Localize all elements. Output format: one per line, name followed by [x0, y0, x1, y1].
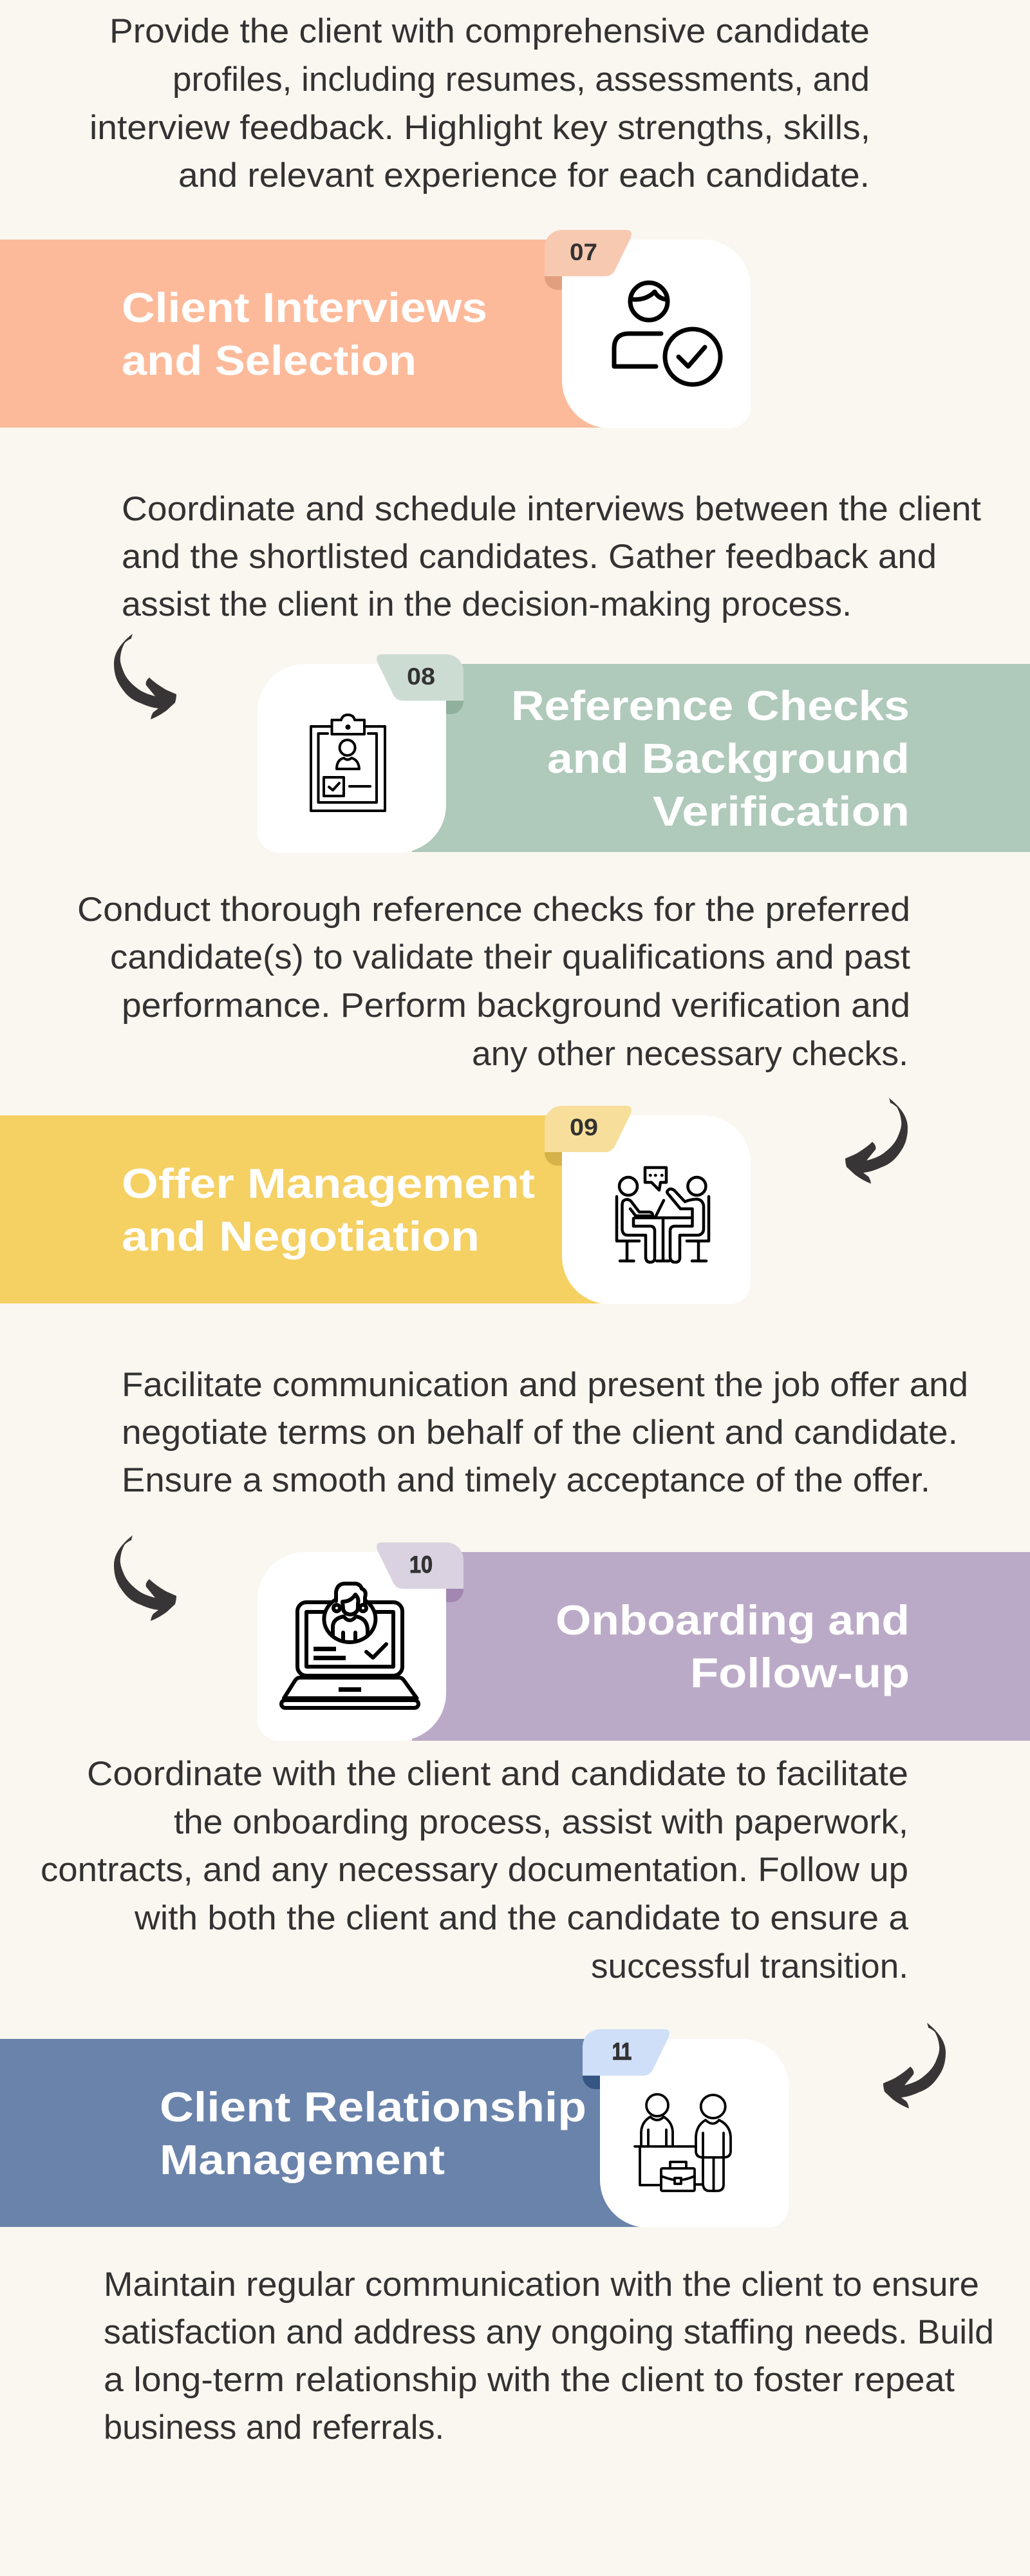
- text block: onboarding: contracts, and any necessary documentation. Follow up: [41, 1851, 908, 1889]
- text block: candidate profiles: Provide the client with comprehensive candidate: [109, 12, 870, 50]
- tab: step 09: [545, 1106, 632, 1152]
- text block: client interviews: Coordinate and schedule interviews between the client: [122, 490, 981, 528]
- heading: client relationship management: Client Relationship: [160, 2083, 586, 2130]
- text block: offer management: Facilitate communication and present the job offer and: [122, 1366, 968, 1404]
- icon detail: laptop bars: [314, 1647, 361, 1692]
- text block: reference checks: candidate(s) to validate their qualifications and past: [110, 938, 910, 976]
- panel: step 10 onboarding and follow-up: [258, 1542, 1030, 1741]
- arrow: curving left toward step 11: [883, 2023, 946, 2108]
- banner: step 07: [0, 240, 608, 428]
- text block: onboarding: [41, 1755, 909, 1985]
- panel: step 09 offer management and negotiation: [0, 1106, 751, 1304]
- card: step 10: [258, 1552, 446, 1741]
- text block: client relationship: [104, 2266, 994, 2447]
- text block: client relationship: a long-term relationship with the client to foster repeat: [104, 2361, 955, 2399]
- text block: onboarding: with both the client and the candidate to ensure a: [134, 1899, 909, 1937]
- heading: reference checks and background verification: Reference Checks: [511, 682, 910, 729]
- icon: two people talking at a table: [617, 1168, 709, 1262]
- heading: offer management and negotiation: and Negotiation: [122, 1213, 480, 1260]
- text block: reference checks: any other necessary checks.: [472, 1035, 908, 1073]
- fold: step 07: [545, 276, 562, 290]
- text block: candidate profiles: and relevant experience for each candidate.: [178, 156, 870, 194]
- arrow: curving right toward step 10: [114, 1535, 176, 1621]
- card: step 09: [562, 1115, 751, 1304]
- banner: step 09: [0, 1115, 608, 1303]
- text block: client interviews: and the shortlisted candidates. Gather feedback and: [122, 538, 937, 576]
- text block: candidate profiles: profiles, including resumes, assessments, and: [173, 61, 870, 99]
- number: 09: 09: [570, 1114, 598, 1141]
- arrow: curving left toward step 09: [845, 1098, 908, 1184]
- text block: onboarding: successful transition.: [591, 1947, 908, 1985]
- icon: receptionist, visitor and briefcase: [635, 2094, 731, 2191]
- tab: step 07: [545, 230, 632, 276]
- number: 07: 07: [570, 239, 597, 265]
- text block: client interviews: [122, 490, 981, 623]
- heading: offer management and negotiation: [122, 1160, 535, 1260]
- text block: reference checks: performance. Perform background verification and: [122, 987, 910, 1025]
- text block: reference checks: Conduct thorough reference checks for the preferred: [77, 891, 910, 929]
- heading: client relationship management: [160, 2083, 586, 2183]
- icon: person with check mark: [614, 283, 720, 384]
- tab: step 11: [583, 2029, 670, 2076]
- banner: step 10: [412, 1552, 1030, 1741]
- card: step 11: [600, 2039, 789, 2228]
- fold: step 08: [446, 701, 464, 714]
- text block: client relationship: business and referrals.: [104, 2409, 444, 2447]
- tab: step 10: [377, 1542, 464, 1589]
- text block: candidate profiles: interview feedback. Highlight key strengths, skills,: [89, 109, 870, 147]
- number: 11: 11: [612, 2038, 632, 2065]
- fold: step 11: [583, 2076, 600, 2089]
- banner: step 08: [412, 664, 1030, 852]
- number: 08: 08: [407, 663, 435, 690]
- banner: step 11: [0, 2039, 644, 2227]
- heading: offer management and negotiation: Offer Management: [122, 1160, 535, 1207]
- heading: onboarding and follow-up: Follow-up: [690, 1649, 910, 1696]
- fold: step 09: [545, 1152, 562, 1166]
- panel: step 11 client relationship management: [0, 2029, 789, 2228]
- text block: offer management: Ensure a smooth and timely acceptance of the offer.: [122, 1461, 930, 1499]
- panel: step 07 client interviews and selection: [0, 230, 751, 428]
- text block: onboarding: the onboarding process, assist with paperwork,: [174, 1803, 908, 1841]
- text block: client relationship: satisfaction and address any ongoing staffing needs. Build: [104, 2313, 994, 2351]
- heading: onboarding and follow-up: [556, 1596, 910, 1696]
- heading: reference checks and background verification: [511, 682, 910, 835]
- text block: reference checks: [77, 891, 910, 1073]
- panel: step 08 reference checks and background verification: [258, 654, 1030, 853]
- icon: laptop with profile and check mark: [281, 1584, 418, 1708]
- text block: offer management: negotiate terms on behalf of the client and candidate.: [122, 1414, 958, 1452]
- number: 10: 10: [409, 1551, 433, 1578]
- icon: clipboard with profile: [311, 715, 385, 811]
- heading: client interviews and selection: and Selection: [122, 337, 417, 384]
- text block: client relationship: Maintain regular communication with the client to ensure: [104, 2266, 979, 2304]
- arrow: curving right toward step 08: [114, 634, 176, 719]
- card: step 07: [562, 240, 751, 428]
- text block: offer management: [122, 1366, 968, 1499]
- text block: onboarding: Coordinate with the client and candidate to facilitate: [87, 1755, 908, 1793]
- text block: candidate profiles: [89, 12, 870, 194]
- text block: client interviews: assist the client in the decision-making process.: [122, 585, 852, 623]
- heading: reference checks and background verification: Verification: [653, 788, 910, 835]
- card: step 08: [258, 664, 446, 853]
- heading: onboarding and follow-up: Onboarding and: [556, 1596, 910, 1643]
- heading: reference checks and background verification: and Background: [547, 735, 910, 782]
- tab: step 08: [377, 654, 464, 701]
- heading: client relationship management: Management: [160, 2136, 445, 2183]
- heading: client interviews and selection: [122, 284, 487, 384]
- heading: client interviews and selection: Client Interviews: [122, 284, 487, 331]
- fold: step 10: [446, 1589, 464, 1602]
